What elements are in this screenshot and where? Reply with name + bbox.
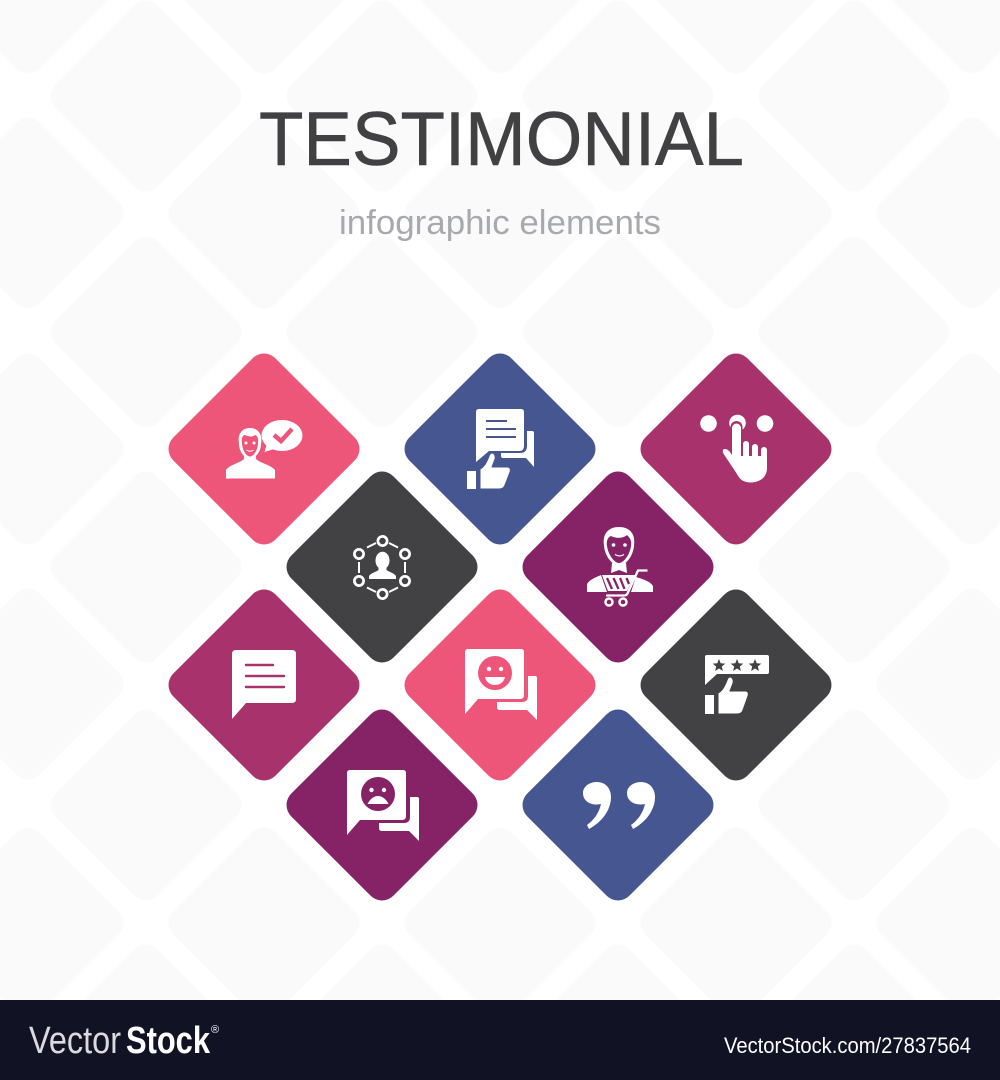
footer image id: VectorStock.com/27837564 xyxy=(724,1033,971,1058)
panel: feedback like xyxy=(398,347,602,551)
subtitle: infographic elements xyxy=(339,204,661,242)
icon: hand pressing a dot xyxy=(700,415,773,482)
panel: quotation xyxy=(516,703,720,907)
icon: quotation marks xyxy=(583,782,655,829)
diamond: magenta xyxy=(634,347,838,551)
icon: sad face speech bubbles xyxy=(347,770,419,841)
panel: social network xyxy=(280,465,484,669)
footer logo: Vector xyxy=(29,1020,121,1062)
diamond: purple xyxy=(516,465,720,669)
icon: speech bubble with text lines xyxy=(232,650,296,719)
icon: chat bubbles with thumbs up xyxy=(467,409,534,489)
icon: person with check speech bubble xyxy=(226,420,302,478)
panel: touch selection xyxy=(634,347,838,551)
diamond: blue xyxy=(516,703,720,907)
diamond: pink xyxy=(162,347,366,551)
diamond: magenta xyxy=(162,583,366,787)
title: TESTIMONIAL xyxy=(259,97,744,182)
panel: customer shopper xyxy=(516,465,720,669)
panel: star rating xyxy=(634,583,838,787)
icon: person in network ring xyxy=(354,536,410,599)
footer logo bold part: Stock xyxy=(126,1020,211,1062)
panel: negative review xyxy=(280,703,484,907)
diamond: dark xyxy=(280,465,484,669)
icon: smiling face speech bubbles xyxy=(465,649,537,720)
footer bar xyxy=(0,1000,1000,1080)
icon: star rating with thumbs up xyxy=(705,655,769,714)
panel: comment message xyxy=(162,583,366,787)
diamond: purple xyxy=(280,703,484,907)
registered mark: ® xyxy=(211,1024,219,1036)
icon: man with shopping cart xyxy=(587,527,653,606)
diamond: pink xyxy=(398,583,602,787)
diamond: dark xyxy=(634,583,838,787)
panel: positive review xyxy=(398,583,602,787)
diamond: blue xyxy=(398,347,602,551)
panel: customer approval xyxy=(162,347,366,551)
